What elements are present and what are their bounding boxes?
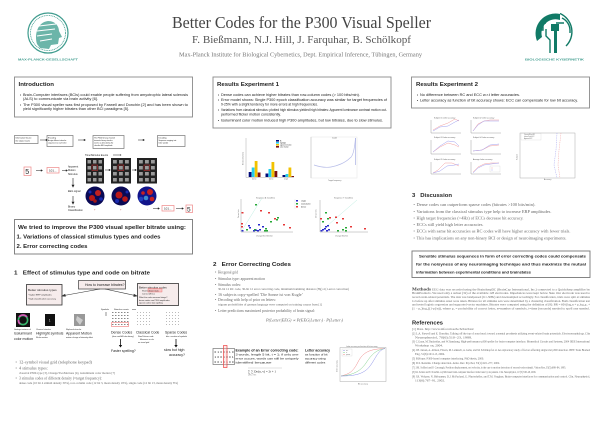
text: letter accuracy [305,348,330,364]
bar chart: bitrates per stimulus: dense [252,178,256,180]
text: introduction bullets [20,93,188,111]
text: discussion bullets: • [414,216,416,220]
text: section 2 bullets: Letter predictions maximized posterior probability of brain signal: [218,309,315,313]
authors: F. Bießmann, N.J. Hill, J. Farquhar, B. Schölkopf [192,35,412,46]
small multiples: subject accuracy curves [431,116,501,174]
classification marks [94,208,148,212]
text: discussion bullets [414,203,571,240]
bar chart: bitrates per stimulus: Bitrate [bits/min] [242,152,244,165]
text: experiment 1 bullets: Variations from classical stimulus: plotted high stimulus yielded high bitrates: Apparent luminance contrast motion out- [221,108,387,112]
callout: conclusion: Sensible stimulus sequences in form of error correcting codes could compensate [419,254,587,258]
text: experiment 2 bullets: Letter accuracy as function of bit accuracy shows: ECC can compensate for low bit accuracy. [420,98,578,102]
chart: accuracy per subject: Accuracy [544,178,551,181]
text: methods: 1s before up after stimulus onset were taken. Bitrates for all stimulus sets were determined by a clustering classification. Both classification test [412,300,590,303]
classification marks: + [94,208,96,212]
text: section 1 bullets: 4 stimulus types: [19,366,48,370]
text: discussion bullets: • [414,236,416,240]
code matrices [101,308,179,326]
text: experiment 1 bullets: Dense codes can achieve higher bitrates than row-column codes (> 100 bits/min). [221,93,360,97]
labels: stimulus and signal stages: Apparent [68,166,78,168]
callout: improving the speller: 2. Error correcting codes [16,244,88,250]
logo: Max-Planck-Gesellschaft: MAX-PLANCK-GESELLSCHAFT [18,58,78,62]
classification marks: + [120,208,122,212]
callout: conclusion: information between experimental conditions and brainstates [416,270,531,274]
text: section 2 bullets: Stimulus type: apparent motion [218,277,265,281]
example matrix: error correcting code [213,346,234,368]
text: section 1 bullets: 3 stimulus codes of different density (=target frequency): [19,376,102,380]
box: how to increase bitrates: How to increase bitrates? [85,283,125,287]
label: isoluminant color motion [14,328,33,341]
legend: scatter groups: dense [301,206,306,208]
label: apparent motion: Apparent Motion [66,332,92,336]
text: references list: Workshop on, 2004. [415,344,443,348]
text: discussion bullets: • [414,230,416,234]
text: experiment 1 bullets: 9-25% with a slight tendency for more errors at high frequencies. [221,102,318,106]
logo: Max-Planck-Gesellschaft [18,13,78,62]
text: letter accuracy: accuracy using [305,356,326,360]
chart: accuracy per subject: Apparent ECC [524,137,532,140]
label: highlight symbols: Flicker motion [36,336,48,339]
text: references list: [2] L.A. Farwell and E. Donchin. Talking off the top of your head: toward a mental prosthesis utilizing event-related brain potentials. Electroencephalogr. Clin [412,332,591,336]
line chart: letter accuracy vs bit accuracy: Bit accuracy [358,382,368,386]
plot: subject 5: Subject 05 Letter accuracy [434,158,455,161]
box: binary code input [47,168,59,173]
text: section 2 bullets: • [215,277,217,281]
formula: minimum distance: u∈C, v∈C [248,374,257,376]
box: decoding: Sequence mapping into [158,139,176,142]
label: time/stimulus events [85,154,122,157]
labels: stimulus and signal stages [68,166,83,212]
box: better stimulus codes: sparse codes slow spelling [139,302,163,304]
classification marks: - [147,208,148,212]
text: discussion bullets: Dense codes can outperform sparse codes (bitrates >100 bits/min). [416,203,536,207]
label: time/stimulus events: Time/Stimulus Events [85,154,109,157]
box: better stimulus codes: fewer trials [149,289,159,292]
text: introduction bullets: Brain-Computer interfaces (BCIs) could enable people suffering from amyotrophic lateral sclerosis [23,93,188,97]
line chart: letter accuracy vs bit accuracy [336,345,386,386]
example matrix: error correcting code: 1 0 0 1 0 0 1 [214,355,234,359]
text: section 1 bullets: dense code (10 bit 4 stimuli density 30%), row-column code (12 bit 3, mean density 18%), single code (12 bit 13, mean density 8%) [19,382,178,385]
text: error correcting code example [236,348,299,364]
box: P300 binary channel: The P300 binary channel [94,136,116,140]
line chart: error model: model [332,138,337,140]
text: experiment 1 bullets: Isoluminant color motion induced high P300 amplitudes, but low bitrates, due to slow stimulus. [221,118,383,122]
box: letter 5 input [24,167,31,176]
line chart: error model [311,137,357,182]
icon: highlight symbols [45,314,55,326]
logo: Biologische Kybernetik: BIOLOGISCHE KYBERNETIK [525,58,585,62]
box: better stimulus codes: Better stimulus codes [139,286,167,290]
label: sparse codes: Sparse Codes [165,330,187,334]
label: classical code [136,330,159,344]
plot: subject 2: Subject 02 Letter accuracy [473,116,494,120]
heading: introduction: Introduction [18,82,54,88]
plot: subject 3: Subject 03 Letter accuracy [434,136,455,139]
text: section 2 bullets: • [215,298,217,302]
text: section 2 bullets: 16 subjects copy-spelled ’Die Sonne ist von Kugle’ [218,293,303,297]
label: dense codes: Faster spelling? [111,349,136,353]
labels: stimulus and signal stages: Classification [68,209,83,212]
text: section 2 bullets: Decoding with help of prior on letters: [218,298,276,302]
text: methods [412,288,591,310]
box: encoding [47,136,73,146]
label: apparent motion [66,328,94,339]
text: discussion bullets: • [414,210,416,214]
diagram: stimulus and code tree [14,280,187,357]
text: experiment 2 bullets: No difference between RC and ECC w.r.t letter accuracies. [420,93,520,97]
text: experiment 1 bullets: • [218,118,219,122]
text: references list: [6] D.S. Rensink. Change detection. Annu. Rev. Psychol, 53(1):245–277, 2002. [412,362,500,365]
box: how to increase bitrates [78,280,126,289]
box: decoding: Decoding [158,138,166,140]
line chart: letter accuracy vs bit accuracy: letter accuracy [336,360,338,372]
arrows: tree branches [62,289,137,296]
heading: section 2: 2 Error Correcting Codes [213,262,291,268]
icon: highlight symbols: 1 [49,318,51,322]
text: experiment 1 bullets [218,93,387,122]
scatter plot: subject 7 bitrates [314,198,368,238]
plot: subject 1: Subject 01 Letter accuracy [434,116,455,120]
text: introduction bullets: (ALS) to communicate via brain activity [6]. [23,97,98,101]
text: discussion bullets: This has implications on any non-binary BCI or design of neuroimaging experiments. [416,236,567,240]
text: introduction bullets: • [20,103,21,107]
text: introduction bullets: • [20,93,21,97]
box: better stimulus codes [138,284,178,306]
box: information source [14,136,38,144]
formula: letter posterior: P(Letter|EEG) ∝ P(EEG|Letter i) · P(Letter i) [265,318,344,322]
line chart: letter accuracy vs bit accuracy: rc [346,352,347,354]
label: sparse codes: accuracy? [169,353,185,357]
box: letter 5 input: 5 [25,169,29,176]
box: better stimulus types: • high classification accuracy [28,298,57,300]
legend: bar colours: flk [280,140,282,142]
text: section 1 bullets: 12-symbol visual grid (telephone keypad) [19,360,93,364]
EEG scalp maps [86,186,156,206]
scatter plot: subject 7 bitrates: Sequence Y: bandlimo [334,198,353,200]
label: sparse codes: bits = number of symbols [166,335,187,338]
text: references list: [3] C.Guan, M.Thulasidas, and W.Jianzhang. High-performance p300 speller for brain-computer interface. Biomedical Circuits and Systems, 2004 IEEE International [412,340,590,344]
label: highlight symbols: Highlight symbols [36,332,64,336]
heading: section 3 discussion: 3 Discussion [412,193,452,199]
text: section 1 bullets [16,360,178,385]
text: section 2 bullets: 30-bit 12 RC code, 36-bit 12 error correcting code, minimum hamming distance (Hg) 4 (1-error correction) [218,288,349,291]
line chart: letter accuracy vs bit accuracy: sparse [346,354,350,356]
box: information source: the subject wants [16,140,30,142]
line chart: letter accuracy vs bit accuracy: ecc [346,350,348,352]
box: better stimulus types: Better stimulus types [28,288,57,292]
text: discussion bullets: ECCs still yield high letter accuracies. [416,223,484,227]
text: experiment 1 bullets: performed flicker motion consistently. [221,112,281,116]
text: experiment 1 bullets: Error model shows: Single P300 epoch classification accuracy was similar for target frequencies of [221,98,387,102]
text: discussion bullets: • [414,223,416,227]
box: better stimulus codes: dense codes can P300 amplitudes [139,299,170,302]
labels: stimulus and signal stages: Stimulus [68,173,78,176]
text: references list: [5] B.Hoper. P300-based computer interfacing. PhD thesis, 2000. [412,358,484,360]
title: Better Codes for the P300 Visual Speller [172,13,431,32]
affiliation: Max-Planck Institute for Biological Cybernetics, Dept. Empirical Inference, Tübingen, Germany [179,52,422,58]
label: classical code: Row/Column code [138,336,153,338]
text: error correcting code example: Example of an Error correcting code: [236,348,298,352]
text: references list: Neurophysiol, 70(6):510–23, 1988. [415,336,473,340]
stimulus grids [86,158,157,184]
heading: references: References [412,320,443,326]
legend: scatter groups: row/column [301,202,311,206]
label: dense codes [111,330,136,353]
example matrix: error correcting code: 0 1 0 0 0 1 0 [214,350,234,354]
callout: conclusion: for the noisyness of any neuroimaging technique and thus maximize the mutual [416,262,586,266]
label: apparent motion: motion change of intensity effect [66,336,94,339]
text: section 2 bullets: Stimulus codes: [218,283,241,287]
icon: isoluminant color motion [16,313,30,327]
labels: stimulus and signal stages: Binary [68,206,76,208]
text: references list: [1] Data. http://www.infocom.uzh.ch/dat/data/ [412,328,474,331]
labels: stimulus and signal stages: Motion [68,169,76,172]
chart: accuracy per subject [516,133,575,181]
text: discussion bullets: Variations from the classical stimulus type help to increase ERP amplitudes. [416,210,552,214]
heading: section 1: 1 Effect of stimulus type and code on bitrate [14,270,151,276]
scatter plot: subject 8 bitrates [237,196,293,238]
panel: results experiment 1 [213,77,391,128]
text: references list: 113(6):767–91, 2002. [415,380,445,382]
scatter plot: subject 7 bitrates: Change Bits/min [335,234,348,238]
text: section 2 bullets: Hexgonal grid [218,270,238,274]
callout: improving the speller: We tried to improve the P300 visual speller bitrate using: [18,225,186,231]
text: section 1 bullets: • [16,366,18,370]
text: section 2 bullets: trigram probabilities of german language were computed on training corpus from [1] [218,304,322,306]
heading: results experiment 1: Results Experiment 1 [217,82,279,88]
line chart: error model: Target frequency [328,179,341,182]
label: classical code: Classical Code [136,330,159,334]
arrows: down column [72,178,74,204]
text: methods: (1 − p₂)log₂((1-p)/n)), where p₂ = probability of correct letter, n=number of symbols, t=time (seconds) needed to spell one symbol. [412,307,590,310]
text: methods: Methods [412,288,432,292]
text: error correcting code example: 3 words, length 5 bit, t = 1; if only one [236,352,299,356]
text: section 2 bullets: • [215,283,217,287]
box: P300 binary channel: classifier EEG amplitude [94,144,112,147]
box: binary code output: 101... [164,206,172,210]
text: references list [412,328,591,382]
text: references list: [9] J.R. Wolpaw, N. Birbaumer, D.J. McFarland, G. Pfurtscheller, and T.M. Vaughan. Brain-computer interfaces for communication and control. Clin. Neurophysiol, [412,376,590,378]
box: better stimulus codes: Correct (ECC) [142,293,155,296]
box: P300 binary channel: events as detected by the [94,142,113,144]
scatter plot: subject 8 bitrates: Dense bits [237,209,240,218]
text: experiment 1 bullets: • [218,98,219,102]
label: sparse codes [164,330,187,357]
box: encoding: Assign different stimulus [48,139,66,142]
text: experiment 1 bullets: • [218,108,219,112]
box: better stimulus types: • higher ERP amplitudes [28,294,53,296]
text: section 2 bullets: • [215,309,217,313]
heading: results experiment 2: Results Experiment 2 [416,82,478,88]
line chart: letter accuracy vs bit accuracy: Letter accuracy as function of bit accuracy [346,345,378,348]
chart: accuracy per subject: Isolum/Color ECC [524,136,534,138]
arrows: output [153,208,184,209]
bar chart: bitrates per stimulus: single [284,178,288,180]
text: methods: record event-related potentials. The data was bandpassed (0.1-30Hz) and downsampled accordingly. For classification, trials were split at stimulus [412,296,590,299]
label: dense codes: (also row/Hill letter binary) [112,335,134,338]
label: isoluminant color motion: Isoluminant [14,332,32,336]
text: discussion bullets: • [414,203,416,207]
box: encoding: sequences to each letter [48,142,67,144]
box: decoding: letter symbol [158,142,169,144]
text: section 2 bullets [215,270,349,313]
text: section 1 bullets: classical P300-type [3], Change/TwoMotions [4], isoluminant color motion [7] [19,372,115,375]
text: letter accuracy: different codes [305,360,326,364]
label: apparent motion: Flip-book stimulus [66,328,81,331]
box: letter 5 output [186,205,192,213]
text: references list: [4] J.B. Jansen, A. Allison, F.Kern, M. Lankisch, A. Geha, and M. Schölkopf et al. An exploratory study of factors affecting single trial p300 detection. IEEE Trans Biomed [412,349,591,352]
box: information source: Information Source [16,136,31,140]
legend: bar colours: highlight [280,141,286,144]
box: decoding [158,136,185,146]
text: experiment 2 bullets: • [417,93,418,97]
box: letter 5 output: 5 [187,206,191,213]
legend: bar colours [276,140,292,148]
label: dense codes: Dense Codes [111,330,132,334]
panel: introduction [14,77,192,117]
box: P300 binary channel: transmits binary stimulus [94,139,113,142]
box: encoding: Encoding [48,138,56,140]
text: experiment 1 bullets: • [218,93,219,97]
box: better stimulus types [26,284,62,305]
chart: accuracy per subject: Subject [516,154,518,160]
formula: minimum distance [248,368,282,376]
box: binary code output [162,206,174,211]
formula: minimum distance: ∑ ∑ DH(u, v) = 2t + 1 [248,370,276,374]
legend: bar colours: apparent motion [280,143,292,146]
text: discussion bullets: High target frequencies (>4Hz) of ECCs decrease bit accuracy. [416,216,524,220]
icon: apparent motion [74,314,85,326]
text: section 1 bullets: • [16,360,18,364]
text: introduction bullets: The P300 visual speller was first proposed by Farwell and Donchin [2] and has been shown to [23,103,188,107]
box: better stimulus codes: Shorter [142,289,149,292]
logo: Biologische Kybernetik [525,13,585,61]
panel: results experiment 2 [412,77,590,108]
arrows: top row [40,139,144,141]
text: methods: BrainProducts. We used only a subset (32) of the available 128 electrodes. Impedances were kept below 5kΩ. Our electrode was used to [412,292,591,295]
arrows: input row [36,170,68,171]
example matrix: error correcting code: 0 0 1 0 1 0 0 [214,360,234,364]
label: highlight symbols [36,328,64,339]
bar chart: bitrates per stimulus: dense [269,178,273,180]
text: section 1 bullets: • [16,376,18,380]
callout: improving the speller: 1. Variations of classical stimulus types and codes [16,234,160,240]
box: binary code input: 101... [49,168,57,172]
text: error correcting code example: identified because [236,360,272,364]
text: methods: and tested logistic regression and supported vector machines. Bitrates were computed using the definition of [8]: BR = 60/t(log₂n + p₂log₂p₂ + [412,304,590,306]
text: letter accuracy: Letter accuracy [305,348,330,352]
flowchart: BCI speller pipeline [14,136,192,213]
label: isoluminant color motion: color motion [14,337,33,341]
labels: stimulus and signal stages: EEG signal [68,190,81,193]
plot: subject 4: Subject 04 Letter accuracy [473,136,494,139]
label: sparse codes: slow but high [164,348,184,352]
text: error correcting code example: error occurs, words can still be uniquely [236,356,299,360]
plot: average: Average Letter accuracy [473,158,493,161]
legend: bar colours: color motion [280,145,289,148]
text: letter accuracy: as function of bit [305,352,328,356]
text: references list: [8] J.R. Sellers and E. Donchin. A p300-based brain-computer interface: initial tests by als patients. Clin. Neurophysiol, 117(3):538–48, 2006. [412,371,536,374]
text: section 2 bullets: • [215,293,217,297]
scatter plot: subject 8 bitrates: Change/Sel. Bits/min [256,234,273,238]
callout: improving the speller [14,220,192,254]
label: classical code: Measures a cols [140,338,154,341]
code matrices: Symbols [101,309,109,311]
label: isoluminant color motion: Gratings instance of [14,328,31,331]
label: classical code: on visual grid [138,341,149,344]
text: experiment 2 bullets: • [417,98,418,102]
box: P300 binary channel [93,136,124,148]
bar chart: bitrates per stimulus [242,138,294,180]
text: experiment 2 bullets [417,93,578,102]
text: introduction bullets: yield significantly higher bitrates than other BCI paradigms [5]. [23,107,129,111]
callout: conclusion [412,251,590,278]
box: better stimulus codes: What the code measure brings? [139,296,168,299]
label: highlight symbols: Classical stimulus [36,328,51,331]
chart: accuracy per subject: Classical/Flash RC [524,134,535,136]
legend: scatter groups [295,199,311,209]
text: references list: Eng, 51(6):1011–8, 2004. [415,353,445,356]
text: references list: [7] J.M. Solfieri and P. Cavanagh. Position displacement, not velocity, is the cue to motion detection of second-order stimuli. Vision Res, 35(5):698–84, 1995. [412,366,566,370]
text: section 2 bullets: • [215,270,217,274]
scatter plot: subject 8 bitrates: Sequence A: bandlimo [256,196,275,200]
legend: scatter groups: single [301,200,306,202]
code matrices: Stimulus events [114,308,129,311]
text: methods: EEG data was recorded using the BrainAmpDC (BrainCap International, Inc.) connected to a QuickAmp amplifier by [432,288,591,291]
text: discussion bullets: ECCs with same bit accuracies as RC codes will have higher accuracy with fewer trials. [416,230,571,234]
scatter plot: subject 7 bitrates: Dense bits [314,209,318,218]
